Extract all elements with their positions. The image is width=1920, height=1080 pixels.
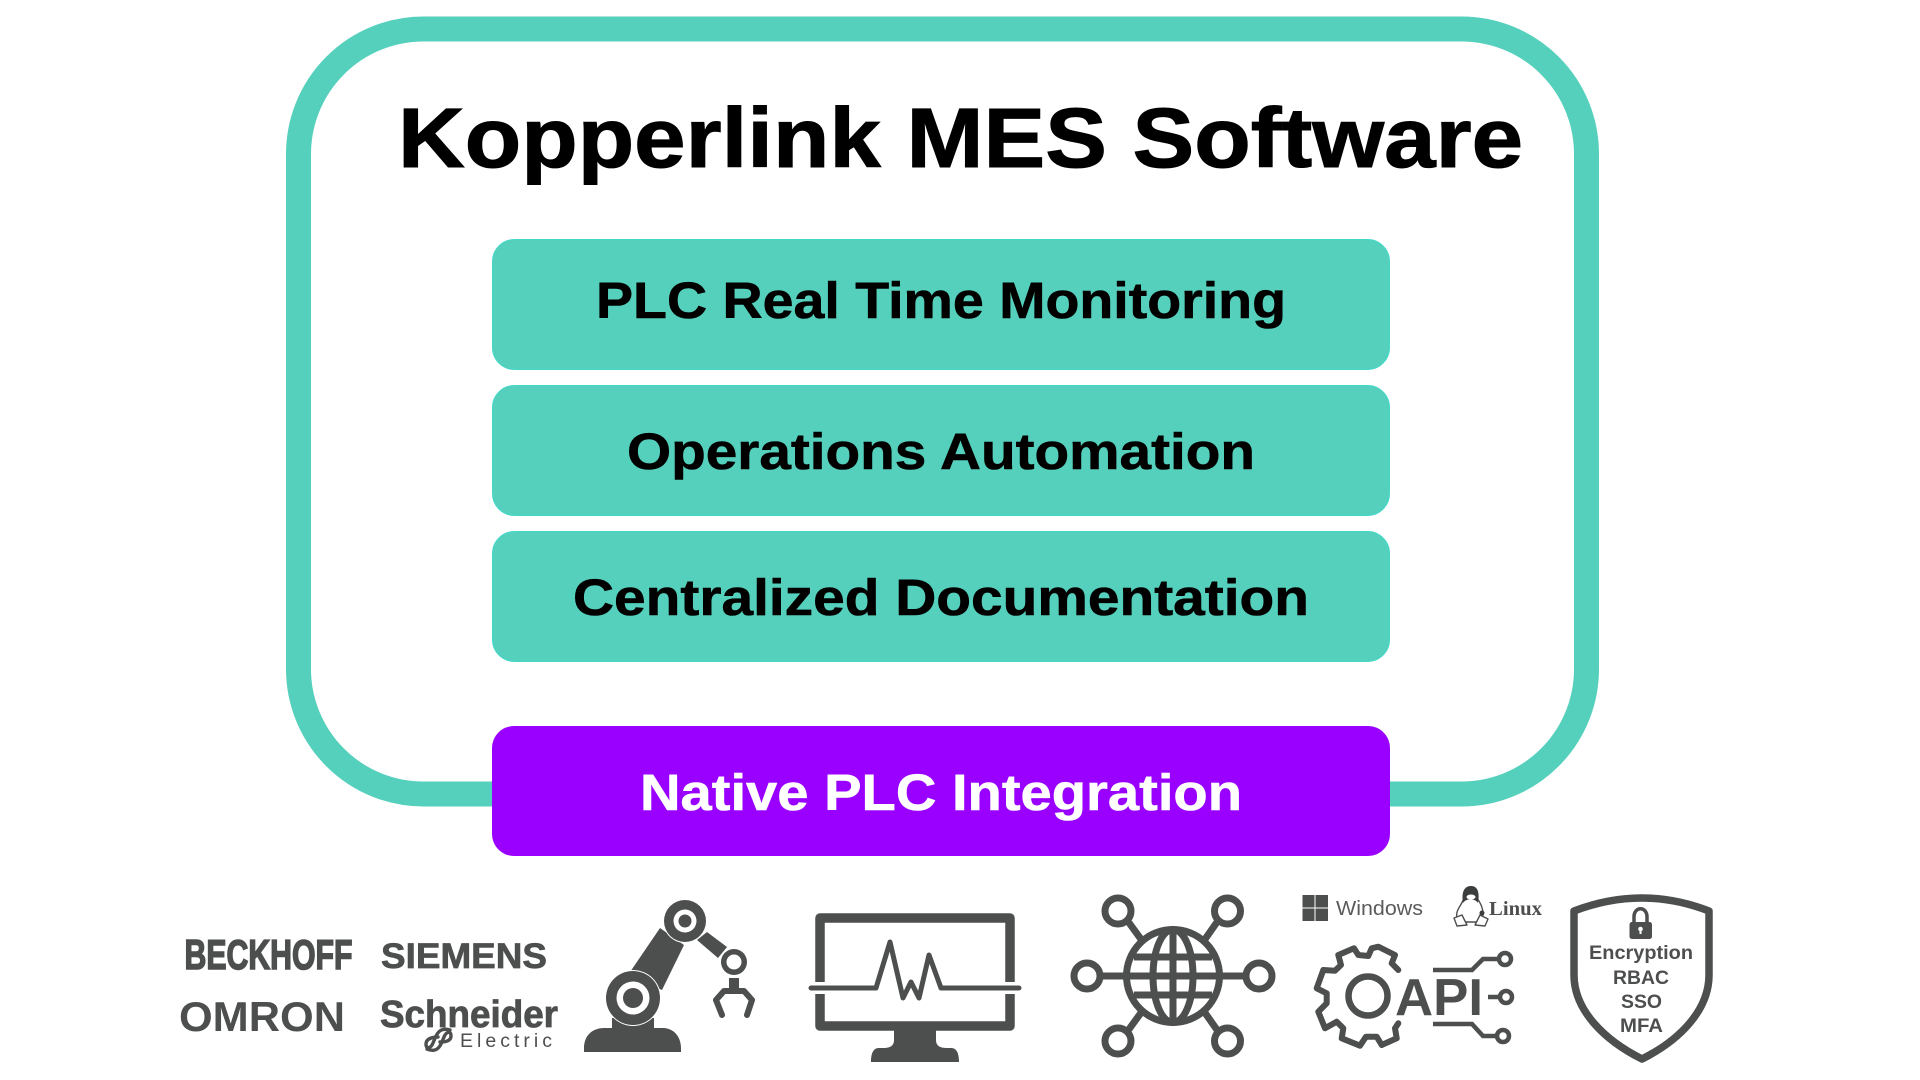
- icon: API gear: API: [1395, 969, 1483, 1027]
- logo: Beckhoff: BECKHOFF: [184, 931, 352, 978]
- icon: robot arm: [584, 899, 752, 1052]
- logo: Siemens: SIEMENS: [381, 937, 547, 976]
- feature box: native PLC integration: Native PLC Integration: [640, 764, 1242, 821]
- feature box: native PLC integration: [492, 726, 1390, 856]
- PLC vendor logos: [179, 931, 558, 1052]
- logo: Windows: Windows: [1336, 897, 1423, 920]
- feature box: operations automation: [492, 386, 1390, 516]
- logo: Linux: [1454, 886, 1542, 926]
- feature box: centralized documentation: Centralized Documentation: [573, 569, 1309, 626]
- icon: monitor with pulse: [811, 918, 1019, 1062]
- feature box: operations automation: Operations Automation: [627, 423, 1255, 480]
- icon: padlock: [1630, 909, 1652, 939]
- logo: Schneider Electric: Electric: [460, 1030, 552, 1052]
- shield text list: SSO: [1621, 991, 1662, 1013]
- panel: Kopperlink MES software outer frame: [298, 29, 1586, 794]
- icon: globe network: [1074, 898, 1272, 1054]
- feature box: PLC real time monitoring: PLC Real Time Monitoring: [596, 272, 1286, 329]
- shield text list: [1589, 942, 1693, 1037]
- logo: Schneider Electric: Schneider: [380, 994, 558, 1036]
- feature box: centralized documentation: [492, 532, 1390, 662]
- icon: security shield: [1574, 898, 1709, 1059]
- logo: Omron: OMRON: [179, 993, 345, 1040]
- shield text list: Encryption: [1589, 942, 1693, 964]
- icon: API gear: [1317, 947, 1512, 1046]
- title: Kopperlink MES Software: [398, 91, 1523, 185]
- shield text list: MFA: [1620, 1015, 1663, 1037]
- feature box: PLC real time monitoring: [492, 240, 1390, 370]
- logo: Linux: Linux: [1489, 898, 1542, 920]
- shield text list: RBAC: [1613, 967, 1669, 989]
- logo: Windows: [1302, 895, 1423, 921]
